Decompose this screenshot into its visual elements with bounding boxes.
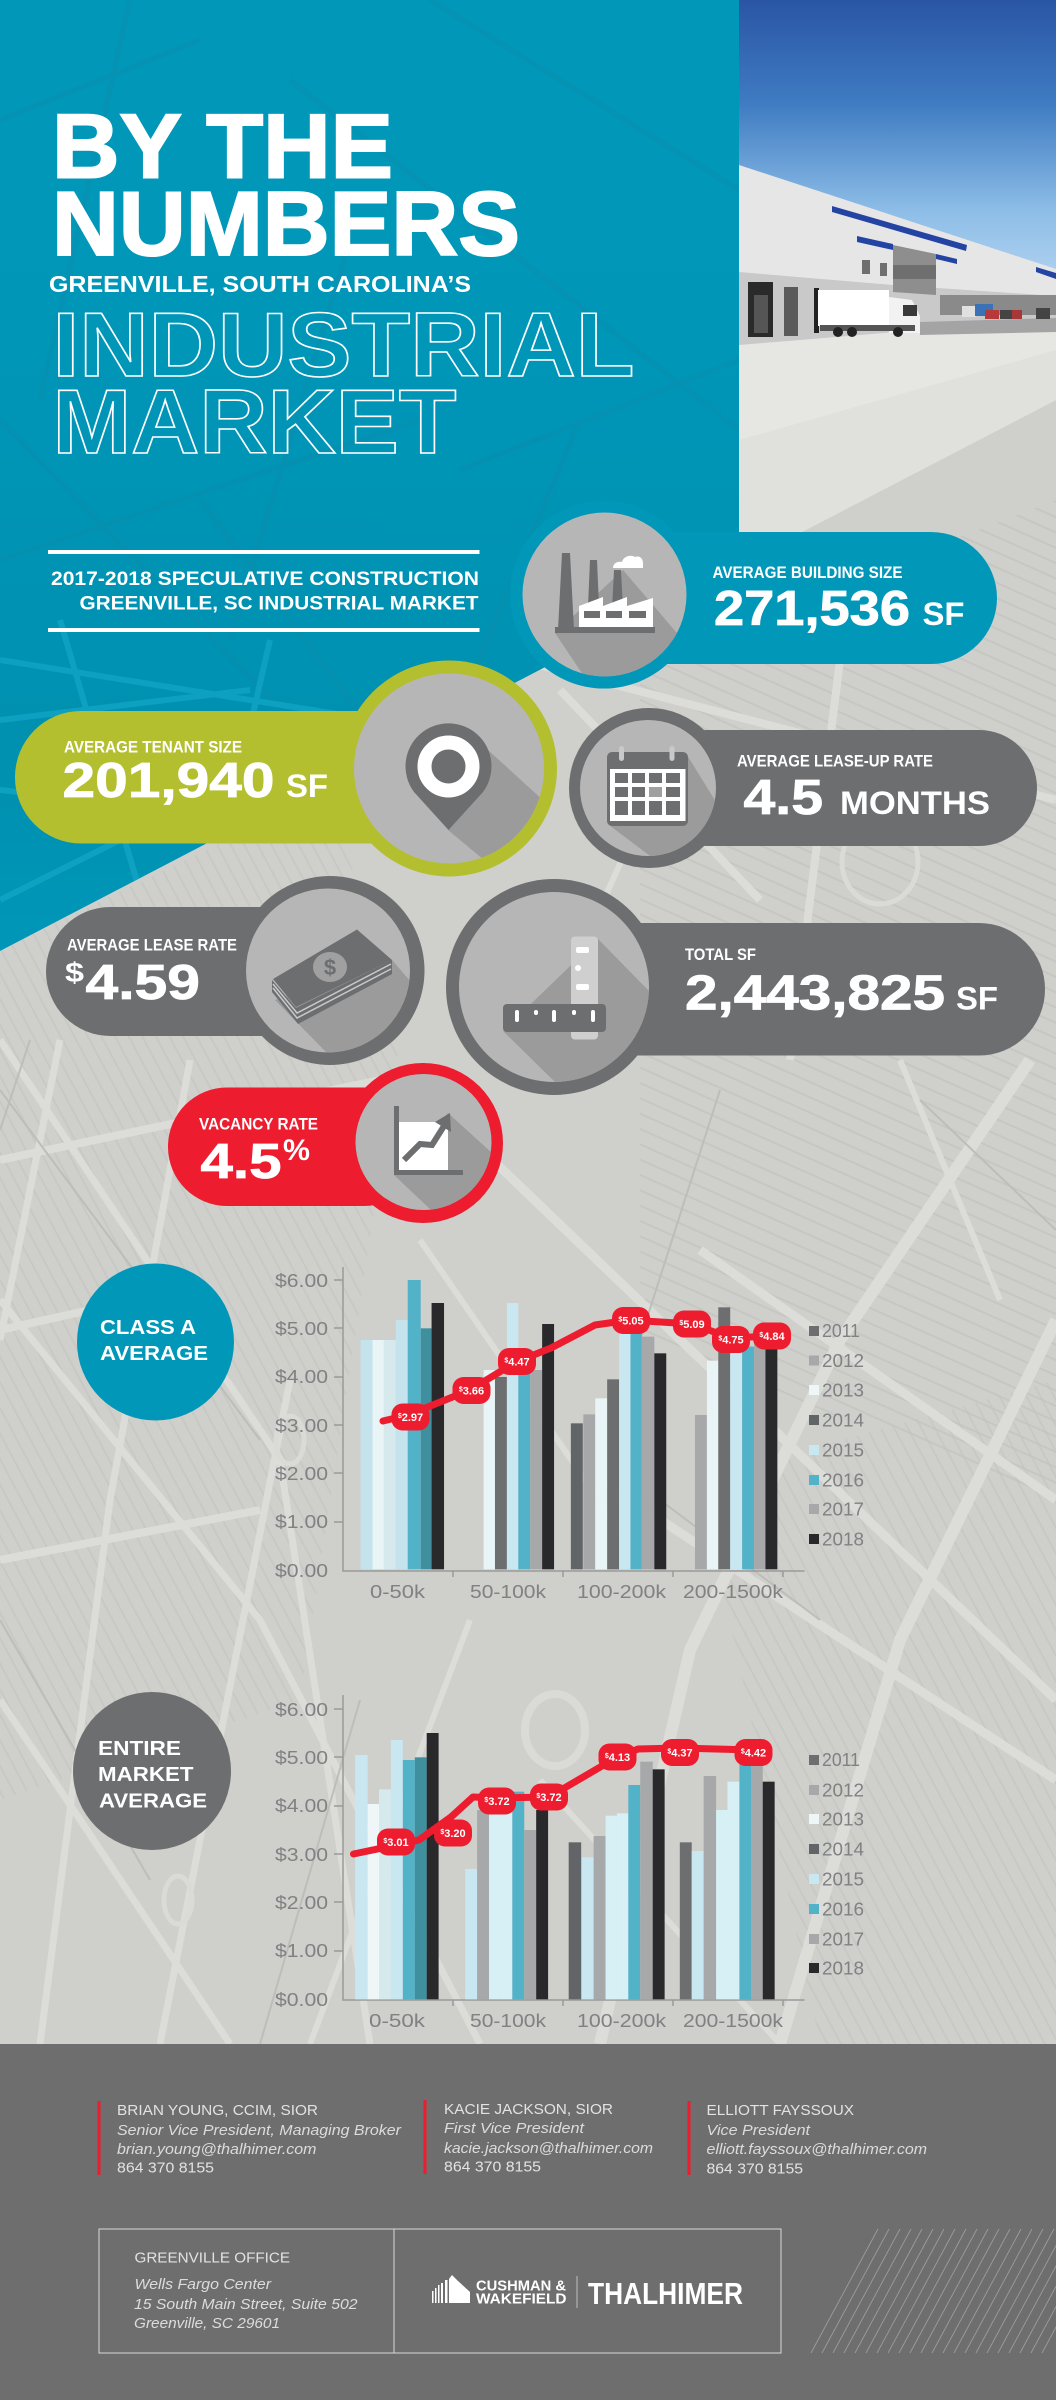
value tags: 5.09	[683, 1319, 705, 1331]
photo: warehouse with truck	[739, 0, 1056, 540]
value tags: 3.72	[540, 1792, 562, 1804]
y axis labels: $0.00	[275, 1561, 328, 1581]
badge: class A average: AVERAGE	[100, 1343, 208, 1365]
bars	[355, 1733, 775, 1999]
icon: stack of money: $	[324, 955, 336, 980]
icon: map pin	[406, 723, 492, 830]
value tags: $	[459, 1386, 463, 1394]
icon: rising chart	[394, 1106, 463, 1175]
value tags: 4.13	[609, 1752, 630, 1764]
value tags: $	[741, 1748, 745, 1756]
contact: Kacie Jackson: 864 370 8155	[444, 2158, 541, 2176]
y axis labels: $6.00	[275, 1271, 328, 1291]
y axis labels: $0.00	[275, 1990, 328, 2010]
value tags: 3.01	[387, 1837, 409, 1849]
x axis labels: 200-1500k	[683, 1582, 784, 1602]
legend: 2015	[822, 1440, 864, 1460]
legend: 2011	[822, 1750, 860, 1770]
stat: average building size: SF	[922, 596, 964, 632]
badge: entire market average: MARKET	[98, 1764, 194, 1786]
x axis labels	[370, 1582, 784, 1602]
legend: 2016	[822, 1900, 864, 1920]
value tags: 3.72	[488, 1796, 510, 1808]
stat: total SF: TOTAL SF	[685, 945, 756, 964]
value tags: $	[383, 1838, 387, 1845]
stat: average tenant size	[15, 660, 557, 880]
outlined title: MARKET: MARKET	[52, 372, 456, 473]
value tags: $	[679, 1320, 683, 1327]
office address: Wells Fargo Center	[134, 2276, 272, 2293]
value tags: 4.42	[745, 1748, 766, 1760]
office and logo box	[99, 2229, 781, 2353]
logo: Cushman & Wakefield Thalhimer	[432, 2275, 743, 2311]
y axis labels: $4.00	[275, 1367, 328, 1387]
stat: average building size: 271,536	[714, 582, 910, 636]
contact: Kacie Jackson: KACIE JACKSON, SIOR	[444, 2101, 613, 2118]
decorative stripes	[811, 2229, 1056, 2353]
stat: vacancy rate	[168, 1063, 503, 1223]
value tags: $	[618, 1316, 622, 1324]
contact: Kacie Jackson	[424, 2100, 653, 2176]
value tags: $	[667, 1748, 671, 1756]
contact: Elliott Fayssoux	[688, 2101, 927, 2178]
outlined title: INDUSTRIAL: INDUSTRIAL	[52, 295, 634, 396]
text block: speculative construction: 2017-2018 SPECULATIVE CONSTRUCTION	[51, 568, 479, 590]
value tags: $	[759, 1332, 763, 1339]
value tags: 2.97	[402, 1412, 423, 1424]
title	[49, 96, 634, 473]
legend: 2013	[822, 1810, 864, 1830]
stat: total SF	[446, 879, 1045, 1095]
contact: Elliott Fayssoux: elliott.fayssoux@thalhimer.com	[706, 2141, 927, 2158]
icon: factory	[555, 553, 655, 633]
y axis labels	[275, 1700, 328, 2010]
stat: vacancy rate: VACANCY RATE	[199, 1114, 318, 1134]
value tags: $	[504, 1358, 508, 1364]
legend: 2011	[822, 1321, 860, 1341]
stat: average lease-up rate: AVERAGE LEASE-UP RATE	[737, 752, 933, 770]
value tags: $	[440, 1829, 444, 1836]
legend	[809, 1321, 864, 1550]
badge: class A average	[77, 1264, 234, 1420]
office address: 15 South Main Street, Suite 502	[134, 2296, 358, 2313]
icon: stack of money	[272, 930, 392, 1024]
value tags: $	[484, 1797, 488, 1804]
x axis labels: 50-100k	[470, 2011, 547, 2031]
contact: Kacie Jackson: kacie.jackson@thalhimer.com	[444, 2140, 653, 2157]
legend	[809, 1750, 864, 1978]
trend line	[383, 1320, 771, 1421]
stat: average building size: AVERAGE BUILDING SIZE	[712, 563, 902, 582]
axes	[334, 1267, 804, 1577]
y axis labels: $3.00	[275, 1416, 328, 1436]
legend: 2015	[822, 1870, 864, 1890]
stat: average lease-up rate: 4.5	[744, 771, 823, 825]
legend: 2014	[822, 1410, 864, 1430]
badge: entire market average: ENTIRE	[98, 1738, 181, 1760]
x axis labels: 200-1500k	[683, 2011, 784, 2031]
y axis labels: $5.00	[275, 1319, 328, 1339]
legend: 2012	[822, 1351, 864, 1371]
legend: 2017	[822, 1500, 864, 1520]
x axis labels: 0-50k	[370, 1582, 426, 1602]
chart: entire market average rents	[275, 1695, 864, 2031]
legend: 2016	[822, 1470, 864, 1490]
y axis labels: $4.00	[275, 1796, 328, 1816]
panel: teal header background	[0, 0, 739, 960]
y axis labels: $1.00	[275, 1941, 328, 1961]
y axis labels: $2.00	[275, 1893, 328, 1913]
legend: 2018	[822, 1530, 864, 1550]
stat: average lease rate: 4.59	[86, 956, 200, 1010]
stat: average building size	[510, 512, 997, 688]
value tags: 4.37	[671, 1748, 693, 1760]
office address: GREENVILLE OFFICE	[134, 2250, 290, 2266]
value tags: $	[398, 1413, 402, 1420]
stat: vacancy rate: %	[283, 1134, 310, 1167]
stat: vacancy rate: 4.5	[200, 1135, 282, 1189]
x axis labels: 100-200k	[577, 1582, 667, 1602]
title line: BY THE: BY THE	[52, 96, 393, 198]
y axis labels: $1.00	[275, 1512, 328, 1532]
value tags	[392, 1307, 791, 1430]
y axis labels: $6.00	[275, 1700, 328, 1720]
legend: 2018	[822, 1958, 864, 1978]
text block: speculative construction	[48, 550, 480, 632]
contact: Brian Young	[98, 2101, 402, 2176]
trend line	[354, 1748, 753, 1854]
axes	[334, 1695, 804, 2006]
legend: 2017	[822, 1930, 864, 1950]
stat: average tenant size: 201,940	[62, 754, 274, 808]
text block: speculative construction: GREENVILLE, SC INDUSTRIAL MARKET	[80, 592, 479, 614]
office address: Greenville, SC 29601	[134, 2315, 280, 2332]
value tags: 3.20	[444, 1828, 466, 1840]
value tags: 4.84	[763, 1331, 786, 1343]
y axis labels: $3.00	[275, 1845, 328, 1865]
stat: average tenant size: AVERAGE TENANT SIZE	[64, 738, 242, 756]
badge: entire market average	[73, 1692, 231, 1850]
title line: NUMBERS: NUMBERS	[52, 174, 520, 275]
chart: class A average rents	[275, 1267, 864, 1602]
value tags: $	[718, 1336, 722, 1342]
icon: ruler and square	[503, 936, 606, 1040]
value tags: 4.47	[508, 1356, 530, 1368]
contact: Brian Young: 864 370 8155	[117, 2160, 214, 2176]
contact: Kacie Jackson: First Vice President	[444, 2120, 585, 2137]
icon: calendar	[607, 746, 688, 826]
logo: Cushman & Wakefield Thalhimer: WAKEFIELD	[476, 2292, 566, 2308]
x axis labels: 0-50k	[369, 2011, 426, 2031]
legend: 2014	[822, 1840, 864, 1860]
bars	[361, 1280, 777, 1569]
subtitle: GREENVILLE, SOUTH CAROLINA’S	[49, 271, 471, 297]
contact: Brian Young: Senior Vice President, Managing Broker	[117, 2122, 402, 2139]
stat: average lease-up rate: MONTHS	[840, 785, 990, 821]
value tags	[377, 1739, 772, 1856]
stat: average lease rate: $	[65, 957, 85, 988]
stat: total SF: 2,443,825	[685, 966, 945, 1020]
value tags: 5.05	[622, 1316, 644, 1328]
contact: Elliott Fayssoux: 864 370 8155	[706, 2160, 803, 2178]
stat: average tenant size: SF	[286, 768, 328, 804]
legend: 2013	[822, 1380, 864, 1400]
value tags: $	[536, 1793, 540, 1800]
contact: Brian Young: BRIAN YOUNG, CCIM, SIOR	[117, 2102, 318, 2119]
logo: Cushman & Wakefield Thalhimer: CUSHMAN &	[476, 2278, 567, 2294]
badge: entire market average: AVERAGE	[99, 1790, 207, 1812]
stat: average lease rate: AVERAGE LEASE RATE	[67, 936, 237, 954]
value tags: $	[605, 1753, 609, 1760]
contact: Brian Young: brian.young@thalhimer.com	[117, 2141, 316, 2158]
office address	[134, 2250, 358, 2332]
y axis labels: $2.00	[275, 1464, 328, 1484]
y axis labels	[275, 1271, 328, 1581]
contact: Elliott Fayssoux: Vice President	[706, 2122, 811, 2139]
value tags: 4.75	[722, 1334, 744, 1346]
x axis labels: 50-100k	[470, 1582, 547, 1602]
stat: average lease rate	[46, 876, 424, 1065]
x axis labels	[369, 2011, 784, 2031]
y axis labels: $5.00	[275, 1748, 328, 1768]
contact: Elliott Fayssoux: ELLIOTT FAYSSOUX	[706, 2102, 854, 2119]
x axis labels: 100-200k	[577, 2011, 667, 2031]
value tags: 3.66	[463, 1386, 484, 1398]
legend: 2012	[822, 1780, 864, 1800]
badge: class A average: CLASS A	[100, 1317, 196, 1339]
stat: total SF: SF	[956, 980, 998, 1016]
panel: footer	[0, 2044, 1056, 2400]
stat: average lease-up rate	[569, 708, 1037, 868]
logo: Cushman & Wakefield Thalhimer: THALHIMER	[588, 2276, 743, 2311]
